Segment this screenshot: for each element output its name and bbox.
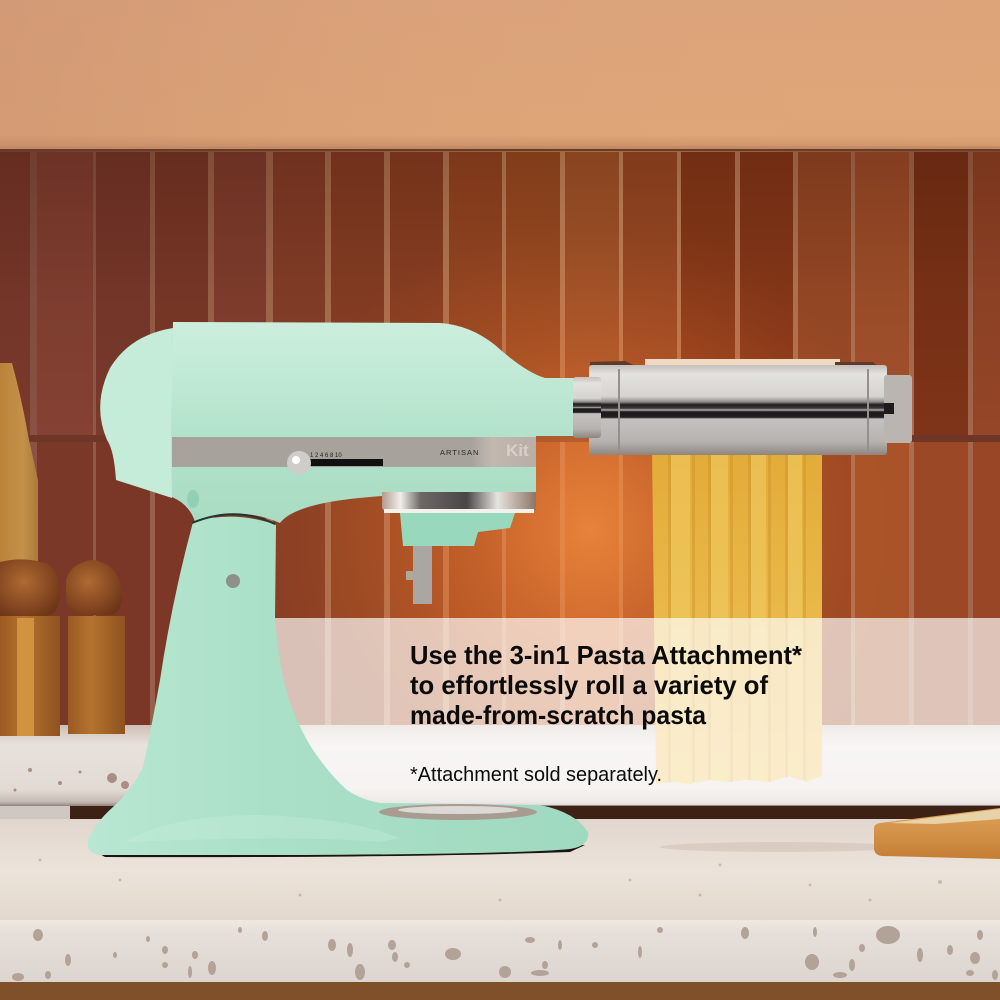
upper wall bbox=[0, 0, 1000, 150]
mixer base and pedestal bbox=[88, 517, 588, 855]
wooden vase bbox=[0, 363, 38, 570]
mixer head rear cap bbox=[100, 328, 173, 498]
caption bbox=[410, 640, 803, 786]
pasta strands bbox=[652, 450, 822, 784]
headline line 1: Use the 3-in1 Pasta Attachment* bbox=[410, 640, 803, 670]
mixer bbox=[88, 322, 588, 857]
cutting board bbox=[874, 808, 1000, 859]
beater shaft bbox=[413, 546, 432, 604]
text backdrop bbox=[275, 618, 1000, 805]
speed control: 1 2 4 6 8 10 bbox=[310, 453, 342, 459]
bowl collar bbox=[382, 492, 536, 546]
pasta roller attachment bbox=[573, 359, 912, 455]
headline line 2: to effortlessly roll a variety of bbox=[410, 670, 768, 700]
tile wall bbox=[0, 149, 1000, 739]
speed control bbox=[287, 451, 383, 475]
chrome band bbox=[172, 437, 536, 467]
base highlight bbox=[125, 815, 400, 842]
base plate bbox=[379, 804, 537, 820]
headline line 3: made-from-scratch pasta bbox=[410, 700, 707, 730]
pepper mills bbox=[0, 559, 125, 736]
logo: Kit bbox=[506, 441, 529, 460]
front counter bbox=[0, 819, 1000, 1000]
artisan label: ARTISAN bbox=[440, 448, 479, 457]
mixer head bbox=[171, 322, 574, 523]
head joint line bbox=[192, 514, 275, 524]
base shadow bbox=[98, 845, 585, 857]
back counter bbox=[0, 725, 1000, 819]
bolts bbox=[187, 490, 199, 508]
footnote: *Attachment sold separately. bbox=[410, 764, 662, 786]
